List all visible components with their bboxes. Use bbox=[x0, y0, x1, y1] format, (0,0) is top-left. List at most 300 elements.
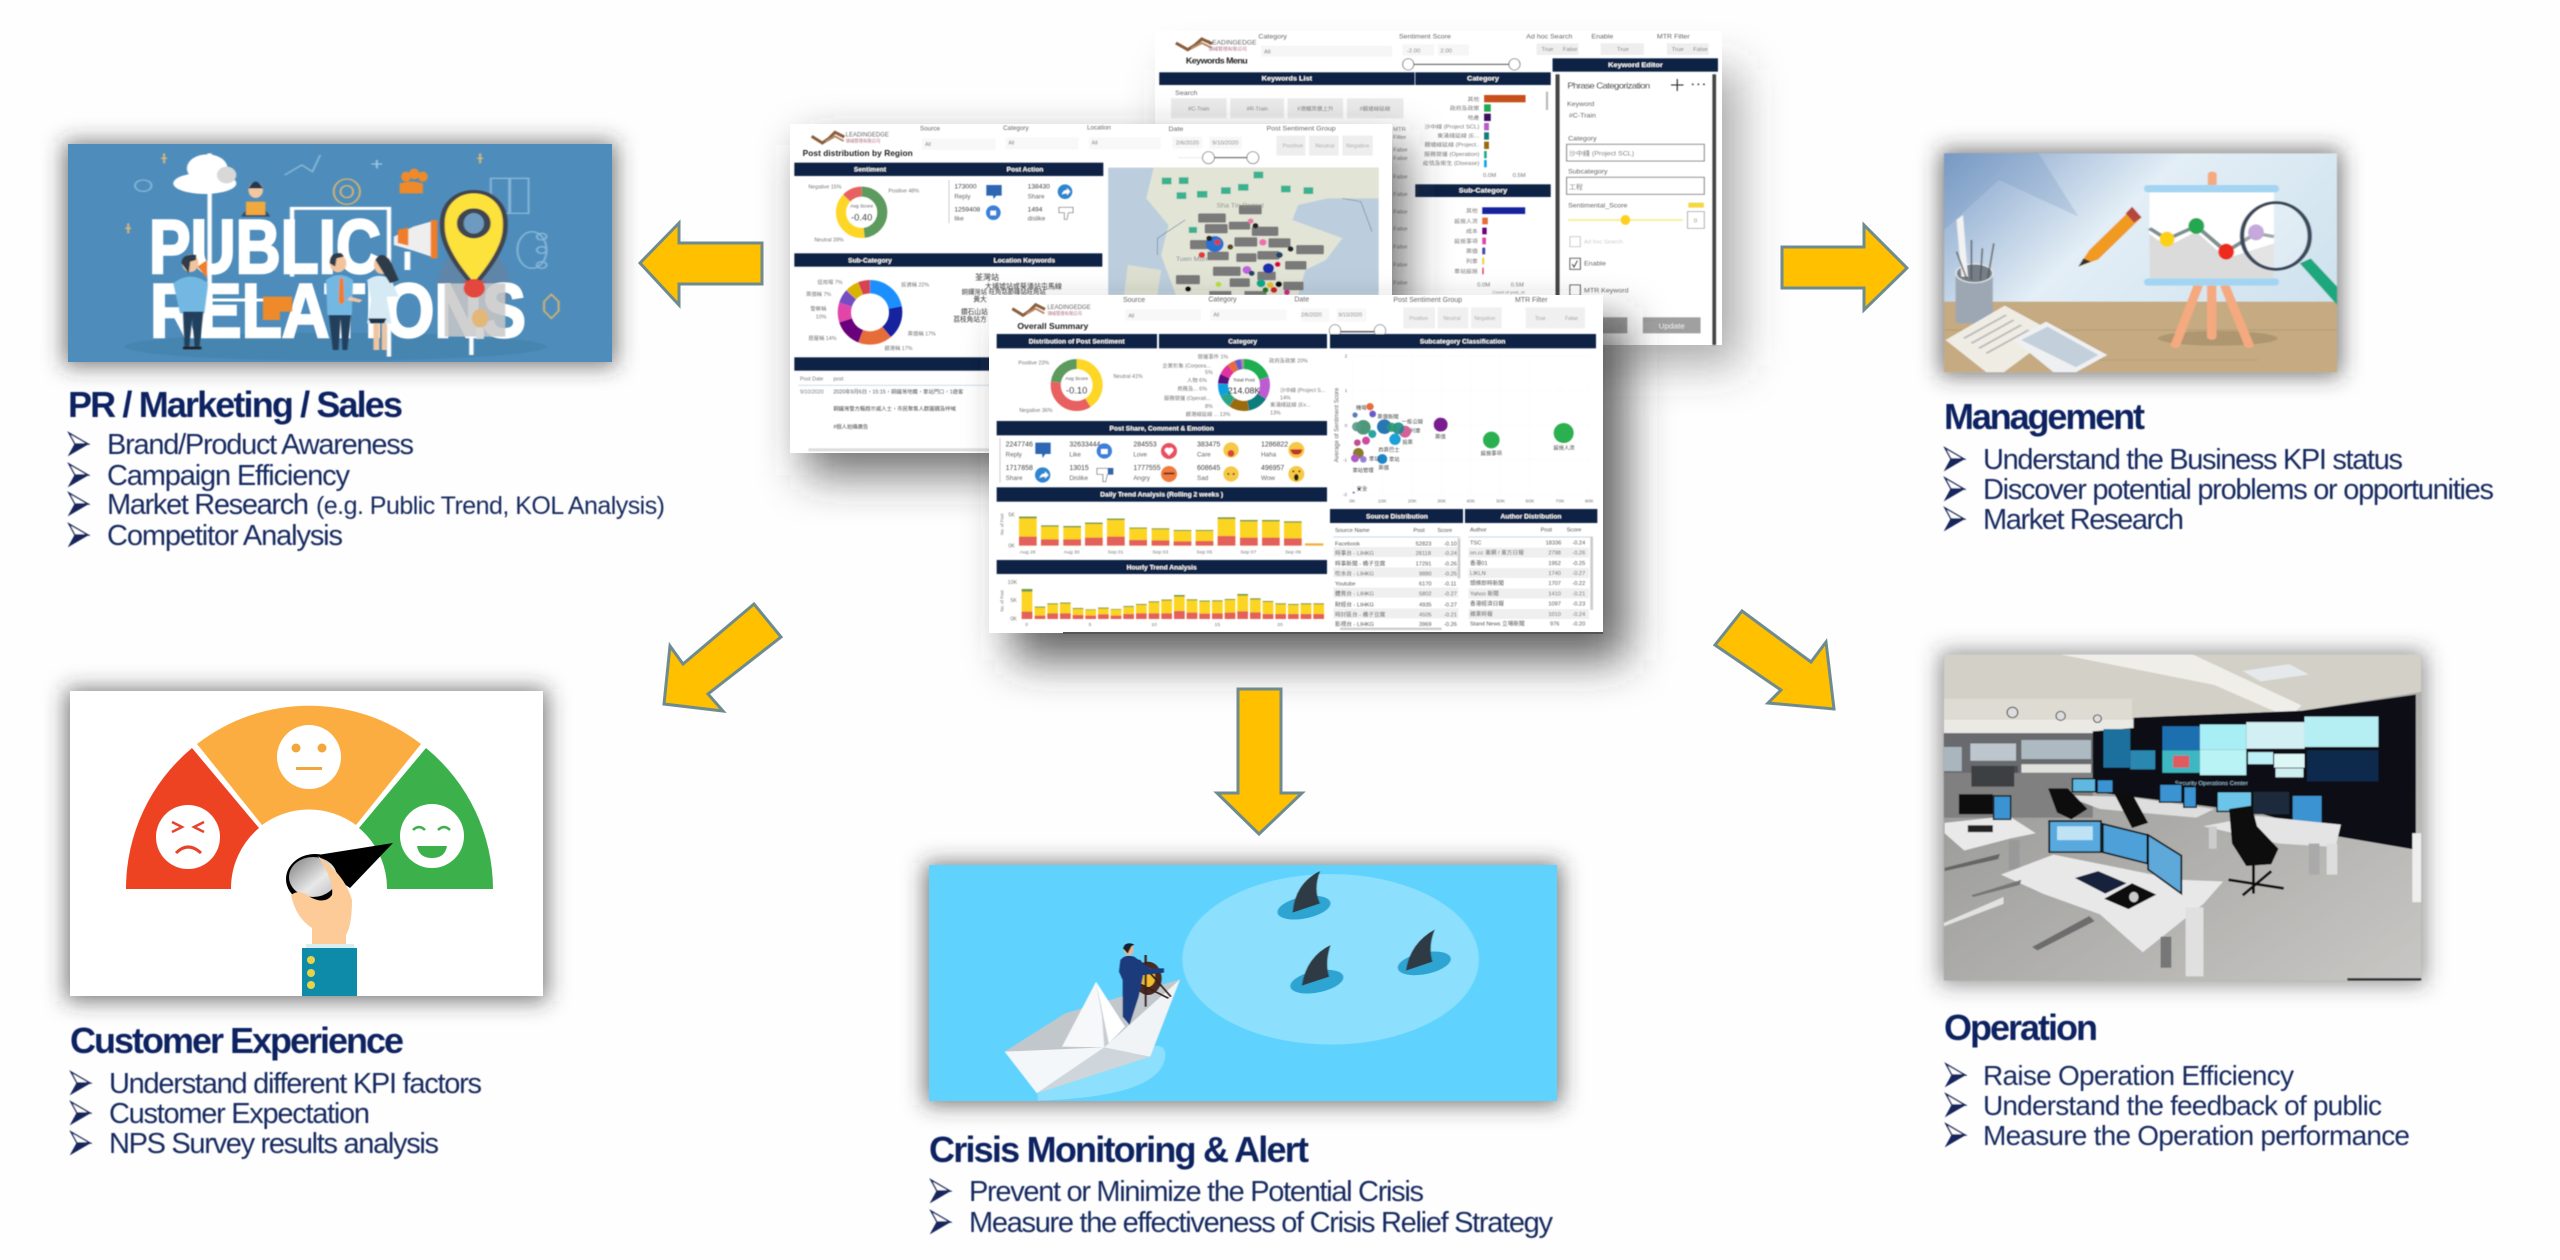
bubble chart: subcategory classification: 投票 bbox=[1402, 438, 1414, 446]
bubble chart: subcategory classification: 安全 bbox=[1357, 484, 1368, 492]
panel: front dashboard Overall Summary: All bbox=[1213, 313, 1219, 319]
panel: back dashboard Keywords Menu: #觀塘線延線 bbox=[1360, 105, 1391, 113]
donut chart: post sentiment bbox=[1056, 364, 1098, 406]
panel: back dashboard Keywords Menu: False bbox=[1393, 227, 1408, 233]
bubble chart: subcategory classification: 車站 bbox=[1369, 455, 1380, 463]
panel: front dashboard Overall Summary: 13% bbox=[1270, 411, 1281, 417]
table: author distribution: -0.27 bbox=[1572, 571, 1585, 577]
panel: middle dashboard Post distribution by Region: Positive 48% bbox=[888, 188, 919, 194]
bullet list bbox=[71, 1068, 482, 1160]
panel: PR / Marketing / Sales bbox=[64, 142, 665, 552]
panel: back dashboard Keywords Menu: 沙中綫 (Project SCL) bbox=[1569, 149, 1634, 158]
emotion stats: 13015 bbox=[1069, 465, 1089, 472]
emotion stats: 383475 bbox=[1197, 442, 1220, 449]
figure: man with megaphone bbox=[173, 255, 208, 349]
panel: back dashboard Keywords Menu: MTR Filter bbox=[1657, 34, 1690, 40]
illustration: security operations center photo: Security Operations Center bbox=[2175, 781, 2248, 787]
emotion stats: Share bbox=[1006, 475, 1023, 482]
bullet list: Prevent or Minimize the Potential Crisis bbox=[969, 1176, 1424, 1208]
table: source distribution: Post bbox=[1413, 528, 1425, 534]
panel: front dashboard Overall Summary: Source bbox=[1123, 297, 1145, 304]
panel: front dashboard Overall Summary: 領域管理有限公司 bbox=[1047, 310, 1082, 317]
panel: middle dashboard Post distribution by Region: 1494 bbox=[1028, 206, 1043, 213]
table: author distribution: 976 bbox=[1550, 621, 1559, 627]
panel: back dashboard Keywords Menu: Sentimental_Score bbox=[1568, 203, 1628, 209]
bar chart: daily trend: 0K bbox=[1008, 543, 1015, 549]
panel: front dashboard Overall Summary: 企業形象 (Corpora... bbox=[1162, 361, 1211, 369]
table: source distribution: -0.27 bbox=[1444, 602, 1457, 608]
arrow: to Operation bbox=[1715, 611, 1834, 709]
panel: front dashboard Overall Summary: 14% bbox=[1280, 396, 1291, 402]
panel: middle dashboard Post distribution by Region: Location bbox=[1087, 124, 1111, 131]
panel: back dashboard Keywords Menu: False bbox=[1393, 263, 1408, 269]
bullet list: Understand the Business KPI status bbox=[1983, 444, 2403, 476]
table: author distribution: -0.24 bbox=[1572, 541, 1585, 547]
panel: front dashboard Overall Summary: 8% bbox=[1205, 404, 1213, 410]
table: source distribution: -0.11 bbox=[1444, 581, 1456, 587]
bubble chart: subcategory classification: 機場 bbox=[1356, 403, 1367, 411]
bubble chart: subcategory classification: Average of Sentiment Score bbox=[1335, 387, 1341, 462]
panel: front dashboard Overall Summary: 人物 6% bbox=[1187, 376, 1207, 384]
bullet list: Customer Expectation bbox=[109, 1098, 370, 1130]
bullet list bbox=[69, 429, 665, 552]
illustration: public relations figures and map pin bbox=[173, 153, 505, 357]
table: author distribution: Post bbox=[1541, 528, 1552, 534]
panel: back dashboard Keywords Menu: 東涌綫延線 (E... bbox=[1437, 132, 1480, 140]
icon: happy face bbox=[400, 804, 464, 868]
panel: middle dashboard Post distribution by Region: 173000 bbox=[954, 184, 977, 191]
bubble chart: subcategory classification: 80K bbox=[1585, 498, 1594, 504]
table: author distribution: 2798 bbox=[1548, 550, 1561, 556]
panel: front dashboard Overall Summary: Distribution of Post Sentiment bbox=[1029, 338, 1125, 345]
bubble chart: subcategory classification bbox=[1335, 354, 1594, 504]
panel: front dashboard Overall Summary: Hourly Trend Analysis bbox=[1127, 564, 1197, 571]
bubble chart: subcategory classification: 0K bbox=[1349, 498, 1356, 504]
panel: back dashboard Keywords Menu: False bbox=[1393, 156, 1408, 162]
panel: back dashboard Keywords Menu: False bbox=[1393, 245, 1408, 251]
panel: middle dashboard Post distribution by Region: Location Keywords bbox=[994, 257, 1055, 264]
table: source distribution: Score bbox=[1437, 528, 1452, 534]
bar chart: daily trend: Sep 07 bbox=[1240, 549, 1256, 555]
bullet list: Measure the Operation performance bbox=[1983, 1120, 2410, 1151]
table: author distribution: 香港01 bbox=[1470, 559, 1488, 567]
panel: middle dashboard Post distribution by Region bbox=[790, 124, 1405, 475]
table: source distribution: -0.25 bbox=[1444, 572, 1457, 578]
table: source distribution: 吹水台 - LIHKG bbox=[1335, 570, 1374, 578]
table: source distribution: Youtube bbox=[1335, 581, 1356, 587]
bar chart: hourly trend: 0 bbox=[1025, 622, 1028, 628]
panel: back dashboard Keywords Menu: False bbox=[1393, 148, 1408, 154]
panel: middle dashboard Post distribution by Region: 投資稱 22% bbox=[901, 280, 929, 288]
bar chart: daily trend: Sep 09 bbox=[1285, 549, 1301, 555]
table: author distribution: Author bbox=[1470, 528, 1487, 534]
table: source distribution: 影視台 - LIHKG bbox=[1335, 620, 1374, 628]
bubble chart: subcategory classification: -2 bbox=[1343, 492, 1347, 498]
bubble chart: subcategory classification: -1 bbox=[1343, 457, 1347, 463]
bubble chart: subcategory classification: 20K bbox=[1408, 498, 1417, 504]
emotion stats: Wow bbox=[1261, 475, 1275, 482]
panel: front dashboard Overall Summary: 服務營運 (Operati... bbox=[1164, 394, 1210, 402]
panel: front dashboard Overall Summary: Author Distribution bbox=[1500, 513, 1562, 520]
table: author distribution: -0.21 bbox=[1572, 591, 1585, 597]
panel: back dashboard Keywords Menu: Update bbox=[1659, 322, 1685, 330]
panel: front dashboard Overall Summary: Neutral bbox=[1443, 316, 1461, 322]
bullet list: Competitor Analysis bbox=[107, 520, 343, 552]
table: author distribution: 1707 bbox=[1548, 581, 1561, 587]
emotion stats: 496957 bbox=[1261, 465, 1284, 472]
panel: Management bbox=[1940, 150, 2494, 536]
emotion stats: Care bbox=[1197, 451, 1211, 458]
panel: back dashboard Keywords Menu: #C-Train bbox=[1188, 107, 1210, 113]
bubble chart: subcategory classification: 0 bbox=[1345, 423, 1348, 429]
panel: front dashboard Overall Summary: Overall Summary bbox=[1017, 321, 1089, 331]
bullet list: Discover potential problems or opportunities bbox=[1983, 474, 2494, 506]
word cloud: location keywords: 鑽石山站 bbox=[961, 307, 988, 316]
table: source distribution: 28118 bbox=[1416, 551, 1431, 557]
bullet list bbox=[1945, 444, 2494, 536]
panel: back dashboard Keywords Menu: Search bbox=[1175, 90, 1198, 97]
table: source distribution: -0.10 bbox=[1444, 541, 1457, 547]
table: source distribution bbox=[1333, 528, 1460, 630]
emotion stats: 1286822 bbox=[1261, 442, 1288, 449]
panel: back dashboard Keywords Menu: 領域管理有限公司 bbox=[1208, 46, 1247, 52]
bar chart: hourly trend: 5K bbox=[1010, 598, 1017, 604]
panel: middle dashboard Post distribution by Region: 10% bbox=[816, 314, 827, 320]
icon: needle and hand bbox=[286, 843, 393, 996]
table: author distribution: Yahoo 新聞 bbox=[1470, 589, 1499, 597]
figure: business people shaking hands bbox=[326, 253, 399, 350]
panel: front dashboard Overall Summary: Daily Trend Analysis (Rolling 2 weeks ) bbox=[1100, 492, 1223, 499]
panel: middle dashboard Post distribution by Region: -0.40 bbox=[851, 213, 872, 223]
panel: back dashboard Keywords Menu: False bbox=[1393, 192, 1408, 198]
panel: front dashboard Overall Summary: False bbox=[1565, 316, 1578, 322]
bubble chart: subcategory classification: 60K bbox=[1526, 498, 1535, 504]
panel: middle dashboard Post distribution by Region: 銅鑼灣警方驅趕示威人士，市民聚集人群圍觀及呼喊 bbox=[833, 405, 957, 413]
panel: middle dashboard Post distribution by Region: 領域管理有限公司 bbox=[846, 138, 880, 145]
panel: front dashboard Overall Summary: LEADINGEDGE bbox=[1047, 305, 1091, 311]
panel: back dashboard Keywords Menu: 票價 bbox=[1466, 247, 1478, 255]
shark fin bbox=[1394, 929, 1455, 980]
table: source distribution: 5802 bbox=[1419, 592, 1432, 598]
emotion stats: 608645 bbox=[1197, 465, 1220, 472]
emotion stats: Haha bbox=[1261, 451, 1277, 458]
table: author distribution: -0.20 bbox=[1572, 621, 1585, 627]
bubble chart: subcategory classification: 30K bbox=[1437, 498, 1447, 504]
emotion stats: 1777555 bbox=[1133, 465, 1161, 472]
panel: Crisis Monitoring & Alert bbox=[925, 863, 1561, 1239]
panel: back dashboard Keywords Menu: 0 bbox=[1694, 219, 1697, 224]
panel: back dashboard Keywords Menu: 地產 bbox=[1467, 114, 1480, 121]
bubble chart: subcategory classification: 70K bbox=[1556, 498, 1565, 504]
panel: back dashboard Keywords Menu: Keywords List bbox=[1262, 76, 1313, 83]
panel: back dashboard Keywords Menu: 0.5M bbox=[1511, 283, 1524, 288]
table: source distribution: Facebook bbox=[1335, 541, 1360, 547]
panel: Operation bbox=[1940, 652, 2425, 1151]
table: author distribution: -0.25 bbox=[1572, 561, 1585, 567]
panel: back dashboard Keywords Menu: Keyword Editor bbox=[1608, 62, 1663, 69]
bar chart: hourly trend: 20 bbox=[1277, 622, 1283, 628]
panel: front dashboard Overall Summary: Total Post bbox=[1233, 378, 1256, 384]
panel: back dashboard Keywords Menu: 沙中線 (Project SCL) bbox=[1424, 123, 1479, 130]
map of Hong Kong with location pins: Sha Tin District bbox=[1217, 203, 1264, 210]
table: source distribution: 時討區台 - 橋子豆腐 bbox=[1335, 610, 1386, 618]
panel: back dashboard Keywords Menu: All bbox=[1264, 50, 1271, 55]
table: author distribution: 蘋果時報 bbox=[1470, 610, 1493, 618]
bullet list: Market Research bbox=[107, 489, 309, 521]
panel: middle dashboard Post distribution by Region: Avg Score bbox=[850, 204, 873, 210]
panel: back dashboard Keywords Menu: Phrase Categorization bbox=[1567, 81, 1650, 90]
panel: back dashboard Keywords Menu: False bbox=[1393, 281, 1408, 286]
panel: back dashboard Keywords Menu: #港鐵票價上升 bbox=[1297, 105, 1334, 113]
panel: middle dashboard Post distribution by Region: Share bbox=[1028, 193, 1045, 200]
panel: back dashboard Keywords Menu: 列車 bbox=[1466, 257, 1478, 265]
emotion stats: 32633444 bbox=[1069, 442, 1101, 449]
table: source distribution: -0.26 bbox=[1444, 561, 1457, 567]
panel: back dashboard Keywords Menu: 其他 bbox=[1467, 95, 1480, 103]
bar chart: hourly trend: 5 bbox=[1089, 622, 1092, 628]
table: author distribution: Score bbox=[1567, 528, 1581, 534]
bubble chart: subcategory classification: 設施事項 bbox=[1481, 449, 1503, 457]
panel: front dashboard Overall Summary: Category bbox=[1228, 338, 1257, 345]
panel: middle dashboard Post distribution by Region: #個人拍攝廣告 bbox=[833, 422, 869, 430]
panel: front dashboard Overall Summary: Post Sentiment Group bbox=[1393, 297, 1462, 304]
map of Hong Kong with location pins bbox=[1108, 126, 1379, 295]
emotion stats bbox=[1006, 442, 1304, 483]
table: author distribution: -0.23 bbox=[1572, 602, 1585, 608]
bar chart: daily trend: Sep 05 bbox=[1196, 549, 1212, 555]
panel: middle dashboard Post distribution by Region: Post distribution by Region bbox=[803, 148, 913, 158]
bubble chart: subcategory classification: 票價 bbox=[1378, 463, 1390, 471]
panel: back dashboard Keywords Menu: False bbox=[1393, 175, 1408, 180]
panel: front dashboard Overall Summary: 5% bbox=[1205, 370, 1213, 376]
panel: middle dashboard Post distribution by Region: Sub-Category bbox=[848, 257, 892, 264]
panel: Customer Experience bbox=[66, 689, 547, 1160]
panel: front dashboard Overall Summary: Negative 36% bbox=[1019, 408, 1053, 414]
map of Hong Kong with location pins: Negative bbox=[1346, 144, 1369, 149]
panel: back dashboard Keywords Menu: Enable bbox=[1591, 34, 1614, 40]
table: source distribution: 17291 bbox=[1416, 561, 1431, 567]
bubble chart: subcategory classification: 西貢巴士 bbox=[1378, 446, 1400, 454]
panel: back dashboard Keywords Menu: 其他 bbox=[1466, 207, 1478, 215]
table: source distribution: Source Name bbox=[1335, 528, 1370, 534]
panel: back dashboard Keywords Menu: 0.0M bbox=[1483, 173, 1496, 179]
panel: front dashboard Overall Summary: 政府及政策 20% bbox=[1269, 357, 1308, 365]
emotion stats: Sad bbox=[1197, 475, 1209, 482]
panel: middle dashboard Post distribution by Region: Post Date bbox=[800, 377, 823, 383]
panel: middle dashboard Post distribution by Region: dislike bbox=[1028, 216, 1046, 223]
panel: front dashboard Overall Summary: Category bbox=[1208, 296, 1237, 303]
emotion stats: 1717858 bbox=[1006, 465, 1033, 472]
panel: middle dashboard Post distribution by Region: 居屋稱 14% bbox=[808, 335, 837, 342]
panel: middle dashboard Post distribution by Region: Post Action bbox=[1007, 166, 1043, 173]
captain at the wheel bbox=[1119, 943, 1171, 1025]
heading: Crisis Monitoring & Alert bbox=[929, 1129, 1309, 1170]
table: author distribution: 1410 bbox=[1548, 591, 1561, 597]
panel: front dashboard Overall Summary: Avg Score bbox=[1065, 376, 1088, 382]
arrow: to Customer Experience bbox=[664, 604, 781, 711]
panel: middle dashboard Post distribution by Region: All bbox=[925, 142, 931, 148]
panel: middle dashboard Post distribution by Region: Neutral 39% bbox=[814, 237, 844, 243]
bar chart: daily trend: No. of Post bbox=[999, 513, 1004, 535]
panel: front dashboard Overall Summary: Neutral 41% bbox=[1113, 374, 1143, 380]
panel: front dashboard Overall Summary bbox=[989, 295, 1626, 660]
table: author distribution: 18336 bbox=[1546, 541, 1561, 547]
panel: front dashboard Overall Summary: 銀港線延線 ... 13% bbox=[1186, 410, 1231, 418]
emotion stats: Love bbox=[1133, 451, 1148, 458]
bar chart: hourly trend: No. of Post bbox=[999, 589, 1004, 612]
panel: back dashboard Keywords Menu: Enable bbox=[1584, 261, 1606, 268]
table: author distribution: -0.24 bbox=[1572, 612, 1585, 618]
panel: middle dashboard Post distribution by Region: 票價稱 17% bbox=[908, 329, 936, 337]
panel: back dashboard Keywords Menu: False bbox=[1563, 47, 1577, 53]
panel: back dashboard Keywords Menu: True bbox=[1541, 47, 1553, 53]
panel: back dashboard Keywords Menu: False bbox=[1393, 210, 1408, 215]
panel: back dashboard Keywords Menu: #R-Train bbox=[1247, 107, 1268, 113]
panel: middle dashboard Post distribution by Region: 票價稱 7% bbox=[806, 290, 831, 298]
icon: unhappy face bbox=[156, 805, 220, 869]
panel: front dashboard Overall Summary: MTR Filter bbox=[1515, 297, 1548, 304]
bullet list: Campaign Efficiency bbox=[107, 460, 350, 492]
table: source distribution: 3969 bbox=[1419, 622, 1432, 628]
bar chart: hourly trend: 10 bbox=[1151, 622, 1157, 628]
panel: back dashboard Keywords Menu: 政府及政策 bbox=[1450, 104, 1480, 112]
panel: front dashboard Overall Summary: Subcategory Classification bbox=[1420, 338, 1505, 345]
panel: front dashboard Overall Summary: 東涌綫延線 (Ex... bbox=[1270, 401, 1311, 409]
table: author distribution: 1097 bbox=[1548, 602, 1561, 608]
heading: PR / Marketing / Sales bbox=[68, 384, 403, 425]
panel: back dashboard Keywords Menu: True bbox=[1617, 47, 1629, 53]
bubble chart: subcategory classification: 車站管理 bbox=[1352, 466, 1374, 474]
map of Hong Kong with location pins: Post Sentiment Group bbox=[1267, 126, 1336, 132]
bullet list: Understand the feedback of public bbox=[1983, 1090, 2382, 1121]
emotion stats: Dislike bbox=[1069, 475, 1088, 482]
panel: middle dashboard Post distribution by Region: 銀港稱 17% bbox=[884, 344, 913, 352]
panel: back dashboard Keywords Menu: 0.5M bbox=[1513, 173, 1526, 179]
panel: back dashboard Keywords Menu: Category bbox=[1568, 136, 1597, 142]
map of Hong Kong with location pins: 9/10/2020 bbox=[1212, 141, 1238, 146]
bubble chart: subcategory classification: 車站 bbox=[1389, 455, 1400, 463]
word cloud: location keywords: 大埔墟站或葵涌站屯馬線 bbox=[985, 281, 1062, 290]
bubble chart: subcategory classification: 票價 bbox=[1435, 432, 1446, 440]
panel: back dashboard Keywords Menu: Ad hoc Search bbox=[1584, 240, 1623, 245]
panel: back dashboard Keywords Menu: 車站設施 bbox=[1454, 267, 1478, 275]
panel: middle dashboard Post distribution by Region: All bbox=[1008, 141, 1014, 147]
panel: front dashboard Overall Summary: Positive bbox=[1409, 316, 1428, 322]
table: source distribution: 9880 bbox=[1419, 572, 1432, 578]
illustration: paper boat and shark fins bbox=[1005, 871, 1479, 1101]
emotion stats: 2247746 bbox=[1006, 442, 1033, 449]
bullet list: NPS Survey results analysis bbox=[109, 1128, 439, 1160]
bubble chart: subcategory classification: 50K bbox=[1496, 498, 1506, 504]
illustration: public relations background icons bbox=[125, 153, 559, 361]
panel: middle dashboard Post distribution by Region: 138430 bbox=[1028, 184, 1050, 191]
bullet list: Understand different KPI factors bbox=[109, 1068, 482, 1100]
panel: back dashboard Keywords Menu: Category bbox=[1467, 76, 1499, 83]
panel: front dashboard Overall Summary: 沙中線 (Project S... bbox=[1280, 386, 1325, 394]
panel: back dashboard Keywords Menu bbox=[1155, 31, 1740, 365]
table: author distribution: 頭條即時新聞 bbox=[1470, 579, 1504, 587]
table: source distribution: -0.21 bbox=[1444, 612, 1457, 618]
bullet list bbox=[931, 1176, 1554, 1239]
panel: middle dashboard Post distribution by Region: Negative 15% bbox=[808, 185, 842, 191]
bar chart: daily trend: Aug 28 bbox=[1020, 549, 1036, 555]
panel: back dashboard Keywords Menu: 設施事項 bbox=[1454, 237, 1478, 245]
donut chart: sentiment bbox=[841, 192, 882, 233]
heading: Operation bbox=[1944, 1007, 2098, 1048]
shark fin bbox=[1286, 945, 1348, 998]
bubble chart: subcategory classification: 票價新聞 bbox=[1377, 412, 1399, 420]
emotion stats: Angry bbox=[1133, 475, 1151, 482]
panel: front dashboard Overall Summary: All bbox=[1128, 313, 1134, 319]
panel: back dashboard Keywords Menu: True bbox=[1672, 47, 1684, 53]
bubble chart: subcategory classification: 1 bbox=[1345, 388, 1348, 394]
word cloud: location keywords: 荔枝角站方 bbox=[953, 314, 987, 323]
bar chart: daily trend bbox=[999, 513, 1323, 555]
arrow: to Management bbox=[1782, 225, 1907, 310]
bar chart: hourly trend: 10K bbox=[1008, 580, 1018, 586]
map of Hong Kong with location pins: Positive bbox=[1282, 144, 1303, 149]
panel: middle dashboard Post distribution by Region: All bbox=[1092, 141, 1098, 147]
panel: back dashboard Keywords Menu: Subcategory bbox=[1568, 169, 1608, 176]
table: author distribution: -0.22 bbox=[1572, 581, 1585, 587]
panel: back dashboard Keywords Menu: 觀塘線延線 (Project.. bbox=[1424, 141, 1480, 149]
panel: back dashboard Keywords Menu: LEADINGEDGE bbox=[1208, 40, 1256, 46]
panel: middle dashboard Post distribution by Region: 促用場 7% bbox=[817, 278, 843, 286]
panel: back dashboard Keywords Menu: Ad hoc Search bbox=[1526, 34, 1573, 40]
table: author distribution: 1740 bbox=[1548, 571, 1561, 577]
table: author distribution: TSC bbox=[1470, 541, 1481, 547]
panel: back dashboard Keywords Menu: 成本 bbox=[1466, 227, 1478, 235]
bar chart: daily trend: 5K bbox=[1008, 513, 1015, 519]
bar chart: hourly trend bbox=[999, 580, 1324, 628]
table: author distribution: 1952 bbox=[1548, 561, 1561, 567]
bar chart: hourly trend: 15 bbox=[1215, 622, 1220, 628]
arrow: to PR / Marketing / Sales bbox=[640, 223, 762, 305]
panel: back dashboard Keywords Menu: Keywords Menu bbox=[1186, 56, 1248, 65]
bubble chart: subcategory classification: 設施人流 bbox=[1553, 443, 1575, 451]
illustration text: PUBLIC RELATIONS: RELATIONS bbox=[150, 269, 526, 354]
arrow: to Crisis Monitoring bbox=[1217, 689, 1302, 834]
panel: front dashboard Overall Summary: Positive 23% bbox=[1018, 361, 1049, 367]
donut chart: sub-category bbox=[844, 287, 896, 338]
panel: back dashboard Keywords Menu: #C-Train bbox=[1569, 113, 1596, 119]
table: author distribution: on.cc 東網 / 東方日報 bbox=[1470, 548, 1524, 556]
panel: back dashboard Keywords Menu: 服務營運 (Operation) bbox=[1424, 150, 1479, 158]
panel: front dashboard Overall Summary: Post Share, Comment & Emotion bbox=[1110, 426, 1214, 433]
panel: middle dashboard Post distribution by Region: Reply bbox=[954, 193, 971, 200]
panel: back dashboard Keywords Menu: 0.0M bbox=[1477, 283, 1491, 288]
panel: front dashboard Overall Summary: 9/10/2020 bbox=[1338, 313, 1362, 319]
panel: middle dashboard Post distribution by Region: Sentiment bbox=[854, 166, 887, 173]
bullet list: Measure the effectiveness of Crisis Relief Strategy bbox=[969, 1207, 1554, 1239]
panel: middle dashboard Post distribution by Region: like bbox=[954, 216, 964, 223]
panel: middle dashboard Post distribution by Region: Source bbox=[920, 125, 941, 132]
table: source distribution: 時事新聞 - 橋子豆腐 bbox=[1335, 559, 1386, 567]
panel: back dashboard Keywords Menu: 工程 bbox=[1569, 182, 1583, 191]
bullet list bbox=[1946, 1060, 2410, 1151]
emotion stats: Reply bbox=[1006, 451, 1023, 458]
panel: middle dashboard Post distribution by Region: post bbox=[833, 377, 844, 383]
bubble chart: subcategory classification: 40K bbox=[1466, 498, 1476, 504]
illustration: easel chart with magnifier bbox=[1944, 153, 2337, 372]
bar chart: daily trend: Sep 03 bbox=[1152, 549, 1168, 555]
panel: front dashboard Overall Summary: 商務及... 6% bbox=[1177, 385, 1207, 393]
table: source distribution: 時事台 - LIHKG bbox=[1335, 549, 1374, 557]
heading: Management bbox=[1944, 396, 2145, 437]
panel: middle dashboard Post distribution by Region: 9/10/2020 bbox=[800, 389, 824, 395]
map of Hong Kong with location pins: Date bbox=[1169, 126, 1184, 133]
panel: back dashboard Keywords Menu: Count of post_id bbox=[1492, 290, 1525, 295]
